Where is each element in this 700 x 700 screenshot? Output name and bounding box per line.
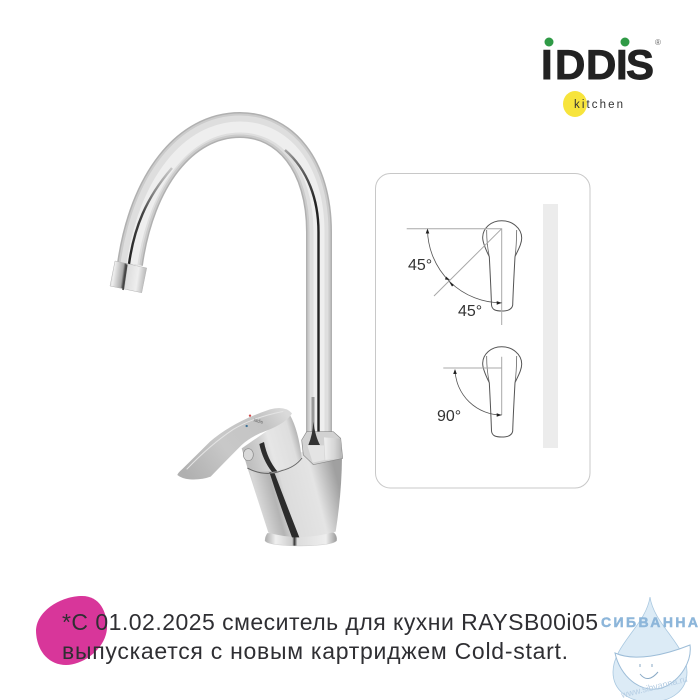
valve body (177, 408, 343, 546)
arrowheads (453, 369, 502, 417)
logo wordmark: IDDIS (541, 41, 654, 88)
logo dot 2 (620, 38, 630, 46)
dark reflection on cone (269, 472, 299, 537)
lever handle (177, 408, 292, 479)
upper cap (242, 415, 302, 471)
bathtub face (640, 664, 658, 679)
inner handle lines (487, 356, 517, 383)
footnote line 2: выпускается с новым картриджем Cold-start. (62, 638, 568, 664)
label: 45 degrees lower: 45° (458, 303, 482, 320)
registered mark: ® (655, 38, 661, 47)
handle outline (483, 221, 522, 311)
handle outline (483, 347, 522, 437)
inner handle lines (487, 230, 517, 257)
angle arc (455, 370, 502, 415)
nozzle joint shadow (123, 265, 127, 290)
lower cone (247, 452, 342, 537)
blue indicator dot (245, 425, 248, 427)
yellow circle (563, 91, 587, 117)
label: 45 degrees upper: 45° (408, 257, 432, 274)
panel frame (376, 174, 590, 488)
guide lines (443, 357, 502, 415)
pink accent blob (36, 596, 107, 665)
footnote line 1: *С 01.02.2025 смеситель для кухни RAYSB00i05 (62, 609, 598, 635)
spout tube (129, 125, 319, 440)
kitchen label: kitchen (574, 99, 623, 111)
footnote text (62, 609, 598, 664)
collar right facet (324, 437, 342, 460)
lever top highlight (187, 411, 283, 469)
bathtub (615, 645, 690, 689)
cap seam (247, 458, 302, 473)
collar front facet (307, 445, 325, 463)
cap dark stripe (259, 442, 277, 472)
pipe clip slot (312, 397, 314, 432)
diagram: 90 degree rotation (443, 347, 522, 437)
panel: handle rotation diagrams (376, 174, 590, 488)
label: 90 degrees: 90° (437, 408, 461, 425)
watermark url: www.sibvanna.ru (619, 674, 689, 700)
grey side bar (543, 204, 558, 448)
water drop (613, 597, 687, 700)
angle arc (428, 230, 502, 303)
logo dot 1 (544, 38, 554, 46)
red indicator dot (249, 414, 251, 417)
lever button (243, 449, 253, 461)
watermark name: СИБВАННА (601, 614, 698, 630)
collar (302, 432, 343, 465)
diagram: 45 degree rotation (407, 221, 522, 325)
watermark: sibvanna (601, 597, 698, 700)
logo (541, 38, 661, 117)
guide lines (407, 229, 502, 325)
arrowheads (426, 228, 502, 305)
lever brand text: iddis (253, 417, 264, 425)
collar dark notch (308, 422, 320, 445)
faucet illustration (110, 125, 343, 546)
spout nozzle (110, 261, 147, 293)
base ring (265, 533, 337, 546)
